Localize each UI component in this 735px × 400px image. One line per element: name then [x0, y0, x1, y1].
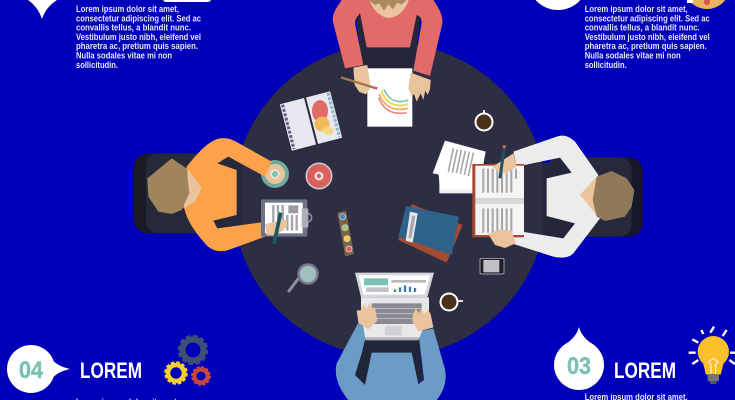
- coffee cup: top: [474, 110, 494, 132]
- heading 01 fragment: [163, 0, 211, 2]
- emoji icon fragment: [684, 0, 730, 9]
- text block 02: sollicitudin.: [585, 60, 627, 70]
- laptop: [355, 273, 434, 340]
- callout 02 marker: [528, 0, 588, 10]
- teal plate: [261, 160, 289, 188]
- text block 02: Vestibulum justo nibh, eleifend vel: [585, 32, 710, 42]
- magnifier: [289, 264, 318, 291]
- text block 01: Nulla sodales vitae mi non: [76, 50, 172, 60]
- red plate: [306, 162, 332, 190]
- person: top, red sweater: [333, 0, 442, 76]
- clipboard: [261, 199, 312, 244]
- colour strip: [337, 211, 354, 257]
- person: bottom, blue sweater with laptop: [336, 323, 446, 400]
- text block 02: Nulla sodales vitae mi non: [585, 50, 681, 60]
- open book: [472, 145, 524, 248]
- callout 03 marker: 03: [567, 353, 591, 380]
- text block 01: Vestibulum justo nibh, eleifend vel: [76, 32, 201, 42]
- icon: light bulb: [689, 327, 735, 384]
- folders: [398, 204, 463, 263]
- callout 04 marker: [7, 345, 70, 393]
- callout 03 marker: [554, 327, 604, 390]
- text block 01: sollicitudin.: [76, 60, 118, 70]
- coffee cup: bottom: [440, 292, 463, 312]
- table: [233, 43, 547, 357]
- text block 01: Lorem ipsum dolor sit amet,: [76, 4, 179, 14]
- person: right, white shirt: [512, 136, 643, 258]
- text block 02: pharetra ac, pretium quis sapien.: [585, 41, 707, 51]
- person: left, orange sweater: [134, 138, 272, 251]
- text block 02: convallis tellus, a blandit nunc.: [585, 23, 700, 33]
- callout 01 marker: [28, 0, 57, 19]
- heading 04: LOREM: [80, 358, 142, 383]
- heading 03: LOREM: [614, 358, 676, 383]
- icon: gears: [165, 336, 210, 385]
- paper with rainbow: [341, 65, 431, 127]
- loose papers: [433, 141, 486, 193]
- text block 01: consectetur adipiscing elit. Sed ac: [76, 13, 201, 23]
- phone: [480, 258, 504, 274]
- text block 01: convallis tellus, a blandit nunc.: [76, 23, 191, 33]
- text block 02: consectetur adipiscing elit. Sed ac: [585, 13, 710, 23]
- callout 04 marker: 04: [19, 357, 44, 384]
- text block 02: Lorem ipsum dolor sit amet,: [585, 4, 688, 14]
- sketchbook: [279, 90, 343, 152]
- text block 01: pharetra ac, pretium quis sapien.: [76, 41, 198, 51]
